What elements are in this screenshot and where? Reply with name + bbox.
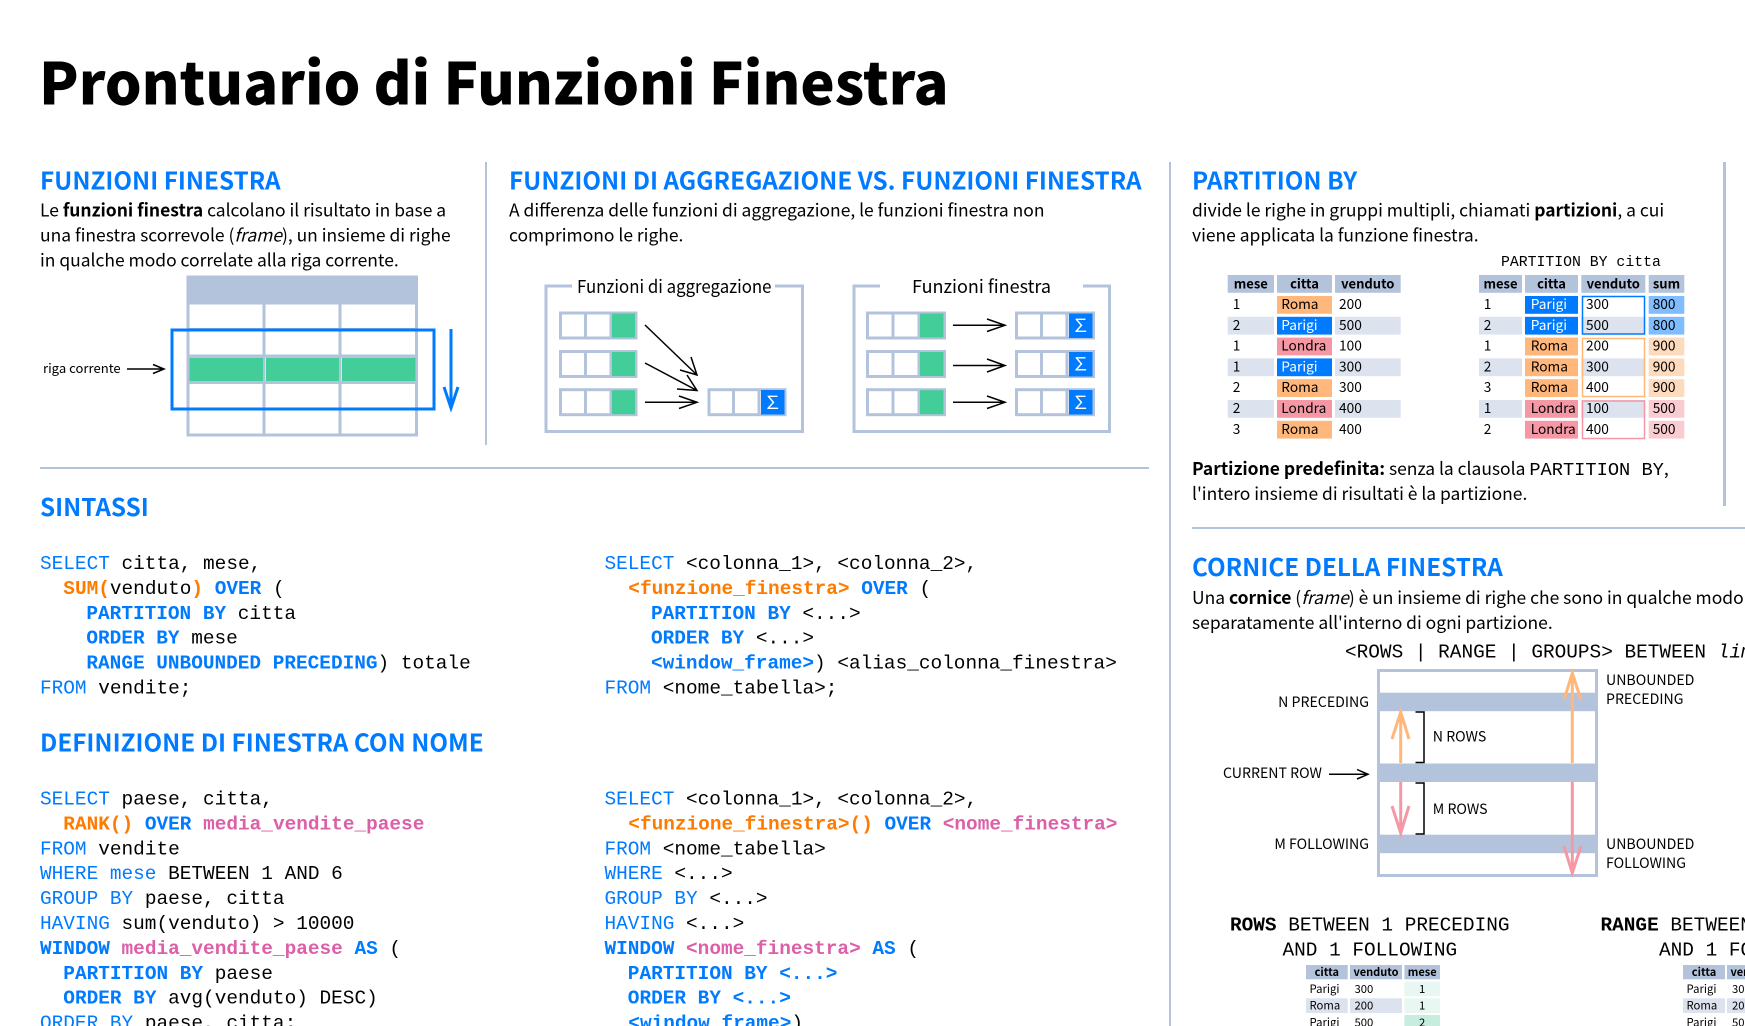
code: modello sintassi: <funzione_finestra> OVER ( bbox=[628, 578, 931, 600]
table: risultato partition by: Parigi bbox=[1531, 293, 1567, 313]
output rows: sigma: ∑ bbox=[1072, 312, 1090, 338]
label: riga corrente: riga corrente bbox=[43, 358, 121, 377]
table: risultato partition by: 400 bbox=[1586, 418, 1609, 438]
table: dati originali: Roma bbox=[1281, 376, 1319, 396]
heading: aggregazione vs finestra: FUNZIONI DI AGGREGAZIONE VS. FUNZIONI FINESTRA bbox=[509, 162, 1142, 196]
code: esempio finestra con nome: WHERE mese BETWEEN 1 AND 6 bbox=[40, 863, 343, 885]
text block: definizione funzioni finestra: Le funzioni finestra calcolano il risultato in base a bbox=[40, 198, 446, 223]
table: dati originali: 2 bbox=[1233, 397, 1240, 417]
table: dati originali: 100 bbox=[1339, 335, 1362, 355]
label: funzioni di aggregazione: Funzioni di aggregazione bbox=[577, 273, 772, 299]
table: risultato partition by: Londra bbox=[1531, 418, 1576, 438]
table: dati originali: 400 bbox=[1339, 418, 1362, 438]
table: dati originali: 2 bbox=[1233, 314, 1240, 334]
table: risultato partition by: Roma bbox=[1531, 335, 1568, 355]
arrow: scorrimento bbox=[444, 329, 458, 408]
table: risultato partition by: 1 bbox=[1484, 335, 1491, 355]
example: rows between: 300 bbox=[1354, 981, 1373, 997]
table: risultato partition by: Roma bbox=[1531, 355, 1568, 375]
code: esempio finestra con nome: HAVING sum(venduto) > 10000 bbox=[40, 913, 354, 935]
text block: partition by: divide le righe in gruppi multipli, chiamati partizioni, a cui bbox=[1192, 198, 1664, 223]
text block: cornice bbox=[1192, 585, 1744, 635]
table: dati originali: Roma bbox=[1281, 418, 1319, 438]
diagram: funzioni di aggregazione bbox=[546, 273, 802, 432]
text block: definizione funzioni finestra bbox=[40, 198, 451, 273]
label: funzioni finestra: Funzioni finestra bbox=[912, 273, 1051, 299]
text block: differenza bbox=[509, 198, 1044, 248]
text block: differenza: comprimono le righe. bbox=[509, 223, 683, 248]
code: modello sintassi: ORDER BY <...> bbox=[651, 628, 814, 650]
code: esempio sintassi: SELECT citta, mese, bbox=[40, 553, 261, 575]
code: modello sintassi: <window_frame>) <alias_colonna_finestra> bbox=[651, 653, 1117, 675]
text block: definizione funzioni finestra: una finestra scorrevole (frame), un insieme di righe bbox=[40, 223, 451, 248]
code: modello finestra con nome: <funzione_finestra>() OVER <nome_finestra> bbox=[628, 813, 1117, 835]
title: Prontuario di Funzioni Finestra bbox=[39, 38, 949, 122]
table: dati originali: 400 bbox=[1339, 397, 1362, 417]
table: risultato partition by: 2 bbox=[1484, 314, 1491, 334]
example: rows between: citta bbox=[1315, 964, 1339, 980]
text block: cornice: separatamente all'interno di ogni partizione. bbox=[1192, 610, 1553, 635]
code: modello sintassi bbox=[604, 553, 1117, 700]
table: risultato partition by: 2 bbox=[1484, 355, 1491, 375]
code: esempio sintassi: ORDER BY mese bbox=[86, 628, 238, 650]
text block: partition by: viene applicata la funzione finestra. bbox=[1192, 223, 1479, 248]
text block: partizione predefinita: Partizione predefinita: senza la clausola PARTITION BY, bbox=[1192, 456, 1669, 481]
text block: cornice: Una cornice (frame) è un insieme di righe che sono in qualche modo bbox=[1192, 585, 1744, 610]
output rows: sigma bbox=[1016, 312, 1094, 415]
table: risultato partition by: Londra bbox=[1531, 397, 1576, 417]
diagram: cornice: CURRENT ROW bbox=[1223, 763, 1323, 783]
panel: funzioni finestra bbox=[40, 162, 458, 435]
code: modello finestra con nome: WHERE <...> bbox=[604, 863, 733, 885]
heading: cornice della finestra: CORNICE DELLA FINESTRA bbox=[1192, 548, 1503, 583]
diagram: cornice: FOLLOWING bbox=[1606, 853, 1686, 873]
panel: sintassi bbox=[40, 488, 1117, 700]
code: modello sintassi: PARTITION BY <...> bbox=[651, 603, 861, 625]
code: modello sintassi: SELECT <colonna_1>, <colonna_2>, bbox=[604, 553, 977, 575]
brackets: n rows, m rows bbox=[1416, 712, 1424, 834]
label: partition by citta: PARTITION BY citta bbox=[1501, 255, 1661, 271]
diagram: cornice: N PRECEDING bbox=[1278, 692, 1369, 712]
arrow: m following bbox=[1392, 782, 1409, 833]
example: rows between: Parigi bbox=[1310, 981, 1339, 997]
example: range between: Parigi bbox=[1686, 981, 1716, 997]
text block: partizione predefinita: l'intero insieme di risultati è la partizione. bbox=[1192, 481, 1527, 506]
arrow: n preceding bbox=[1392, 712, 1409, 763]
table: risultato partition by: Roma bbox=[1531, 376, 1568, 396]
example: rows between: Roma bbox=[1310, 998, 1340, 1014]
table: risultato partition by: sum bbox=[1653, 273, 1680, 292]
text block: differenza: A differenza delle funzioni di aggregazione, le funzioni finestra non bbox=[509, 198, 1044, 223]
table: risultato partition by: 900 bbox=[1653, 376, 1675, 396]
heading: sintassi: SINTASSI bbox=[40, 488, 149, 523]
text block: partition by bbox=[1192, 198, 1664, 248]
text block: partizione predefinita bbox=[1192, 456, 1669, 506]
table: risultato partition by: mese bbox=[1483, 273, 1518, 292]
code: modello finestra con nome: PARTITION BY <...> bbox=[628, 963, 837, 985]
diagram: cornice: UNBOUNDED bbox=[1606, 670, 1694, 690]
example: rows between: AND 1 FOLLOWING bbox=[1282, 940, 1457, 962]
table: risultato partition by bbox=[1479, 273, 1684, 439]
arrows: verso aggregato bbox=[645, 325, 697, 408]
output row: sigma bbox=[709, 389, 785, 415]
arrow: current row bbox=[1329, 770, 1368, 779]
code: esempio sintassi: PARTITION BY citta bbox=[86, 603, 296, 625]
table: dati originali: mese bbox=[1234, 273, 1268, 292]
text block: definizione funzioni finestra: in qualche modo correlate alla riga corrente. bbox=[40, 248, 399, 273]
code: esempio finestra con nome: ORDER BY avg(venduto) DESC) bbox=[63, 988, 378, 1010]
table: dati originali: Londra bbox=[1281, 397, 1326, 417]
table: dati originali: 2 bbox=[1233, 376, 1240, 396]
example: rows between: ROWS BETWEEN 1 PRECEDING bbox=[1230, 915, 1510, 937]
table: risultato partition by: 500 bbox=[1653, 418, 1675, 438]
code: esempio finestra con nome: PARTITION BY paese bbox=[63, 963, 273, 985]
code: esempio finestra con nome: FROM vendite bbox=[40, 838, 180, 860]
code: modello finestra con nome: GROUP BY <...> bbox=[604, 888, 768, 910]
table: risultato partition by: 1 bbox=[1484, 293, 1491, 313]
table: dati originali: Roma bbox=[1281, 293, 1319, 313]
diagram: cornice: PRECEDING bbox=[1606, 689, 1683, 709]
diagram: finestra scorrevole bbox=[43, 276, 458, 435]
example: rows between: mese bbox=[1408, 964, 1437, 980]
table: risultato partition by: 900 bbox=[1653, 335, 1675, 355]
table: dati originali: 200 bbox=[1339, 293, 1362, 313]
diagram: cornice: M ROWS bbox=[1433, 799, 1488, 819]
table: dati originali: 3 bbox=[1233, 418, 1240, 438]
example: rows between: 200 bbox=[1354, 998, 1373, 1014]
table: dati originali: 300 bbox=[1339, 355, 1362, 375]
example: range between: Roma bbox=[1686, 998, 1717, 1014]
table: risultato partition by: 800 bbox=[1653, 314, 1675, 334]
table: dati originali: 1 bbox=[1233, 293, 1240, 313]
example: range between: citta bbox=[1692, 964, 1716, 980]
code: esempio finestra con nome bbox=[40, 788, 424, 1026]
table: risultato partition by: 200 bbox=[1586, 335, 1609, 355]
panel: aggregazione vs finestra bbox=[509, 162, 1142, 432]
code: esempio sintassi: RANGE UNBOUNDED PRECEDING) totale bbox=[86, 653, 471, 675]
example: rows between: 1 bbox=[1419, 998, 1425, 1014]
code: esempio sintassi bbox=[40, 553, 471, 700]
code: modello finestra con nome: ORDER BY <...> bbox=[628, 988, 791, 1010]
diagram: cornice: M FOLLOWING bbox=[1274, 834, 1369, 854]
panel: definizione di finestra con nome bbox=[40, 724, 1117, 1026]
example: range between bbox=[1600, 915, 1745, 1026]
example: rows between bbox=[1230, 915, 1510, 1026]
arrow: unbounded preceding bbox=[1564, 673, 1581, 763]
table: dati originali: citta bbox=[1290, 273, 1319, 292]
table: risultato partition by: 900 bbox=[1653, 355, 1675, 375]
table: dati originali bbox=[1228, 273, 1401, 439]
code: modello sintassi: FROM <nome_tabella>; bbox=[604, 678, 837, 700]
code: modello finestra con nome bbox=[604, 788, 1117, 1026]
table: dati originali: Parigi bbox=[1281, 355, 1318, 375]
table: dati originali: Parigi bbox=[1281, 314, 1318, 334]
example: rows between: venduto bbox=[1353, 964, 1399, 980]
arrows: riga per riga bbox=[953, 319, 1005, 408]
heading: definizione di finestra con nome: DEFINIZIONE DI FINESTRA CON NOME bbox=[40, 724, 484, 758]
table: risultato partition by: 400 bbox=[1586, 376, 1609, 396]
table: risultato partition by: 1 bbox=[1484, 397, 1491, 417]
table: risultato partition by: 2 bbox=[1484, 418, 1491, 438]
panel: cornice della finestra bbox=[1192, 548, 1745, 1026]
table: risultato partition by: 800 bbox=[1653, 293, 1675, 313]
table: dati originali: venduto bbox=[1341, 273, 1394, 292]
example: rows between: 1 bbox=[1419, 981, 1425, 997]
code: esempio finestra con nome: GROUP BY paese, citta bbox=[40, 888, 285, 910]
arrow: unbounded following bbox=[1564, 782, 1581, 873]
code: esempio sintassi: FROM vendite; bbox=[40, 678, 191, 700]
diagram: cornice bbox=[1223, 670, 1694, 876]
table: dati originali: 300 bbox=[1339, 376, 1362, 396]
diagram: cornice: UNBOUNDED bbox=[1606, 834, 1694, 854]
panel: partition by bbox=[1192, 162, 1684, 506]
code: esempio sintassi: SUM(venduto) OVER ( bbox=[63, 578, 285, 600]
table: risultato partition by: 100 bbox=[1586, 397, 1609, 417]
table: risultato partition by: 300 bbox=[1586, 293, 1609, 313]
table: risultato partition by: Parigi bbox=[1531, 314, 1567, 334]
output row: sigma: ∑ bbox=[764, 389, 782, 415]
output rows: sigma: ∑ bbox=[1072, 389, 1090, 415]
code: esempio finestra con nome: WINDOW media_vendite_paese AS ( bbox=[40, 938, 401, 960]
code: modello finestra con nome: WINDOW <nome_finestra> AS ( bbox=[604, 938, 919, 960]
table: dati originali: Londra bbox=[1281, 335, 1326, 355]
heading: partition by: PARTITION BY bbox=[1192, 162, 1358, 196]
code: esempio finestra con nome: RANK() OVER media_vendite_paese bbox=[63, 813, 424, 835]
table: risultato partition by: citta bbox=[1537, 273, 1566, 292]
code: modello finestra con nome: SELECT <colonna_1>, <colonna_2>, bbox=[604, 788, 977, 810]
arrow: riga corrente bbox=[127, 364, 164, 374]
table: dati originali: 1 bbox=[1233, 355, 1240, 375]
diagram: cornice: N ROWS bbox=[1433, 726, 1486, 746]
table: risultato partition by: 500 bbox=[1653, 397, 1675, 417]
table: dati originali: 500 bbox=[1339, 314, 1362, 334]
output rows: sigma: ∑ bbox=[1072, 350, 1090, 376]
heading: funzioni finestra: FUNZIONI FINESTRA bbox=[40, 162, 281, 196]
table: risultato partition by: 500 bbox=[1586, 314, 1609, 334]
table: risultato partition by: 3 bbox=[1484, 376, 1491, 396]
table: dati originali: 1 bbox=[1233, 335, 1240, 355]
table: risultato partition by: venduto bbox=[1587, 273, 1640, 292]
code: modello finestra con nome: FROM <nome_tabella> bbox=[604, 838, 826, 860]
diagram: funzioni finestra bbox=[854, 273, 1110, 432]
code: esempio finestra con nome: SELECT paese, citta, bbox=[40, 788, 273, 810]
table: risultato partition by: 300 bbox=[1586, 355, 1609, 375]
code: modello finestra con nome: HAVING <...> bbox=[604, 913, 744, 935]
